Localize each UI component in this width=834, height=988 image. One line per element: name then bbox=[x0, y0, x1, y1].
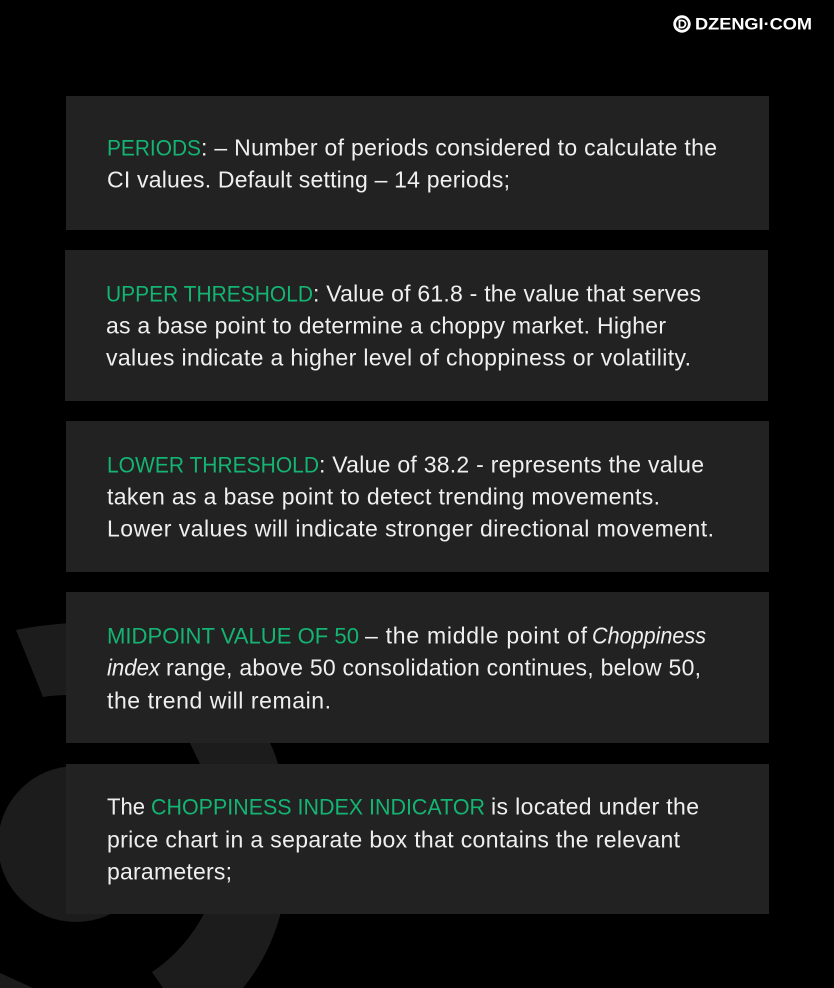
upper threshold text bbox=[106, 280, 701, 370]
panel: upper threshold bbox=[65, 250, 768, 401]
lower threshold text: taken as a base point to detect trending movements. bbox=[107, 483, 660, 509]
lower threshold text: Lower values will indicate stronger directional movement. bbox=[107, 515, 714, 541]
upper threshold text: as a base point to determine a choppy market. Higher bbox=[106, 312, 666, 338]
upper threshold text: : Value of 61.8 - the value that serves bbox=[313, 280, 701, 306]
lower threshold text bbox=[107, 451, 714, 541]
panel: midpoint value bbox=[66, 592, 769, 743]
midpoint text: MIDPOINT VALUE OF 50 bbox=[107, 623, 359, 648]
midpoint text: Choppiness bbox=[592, 622, 706, 648]
midpoint text: the trend will remain. bbox=[107, 687, 331, 713]
indicator location text: parameters; bbox=[107, 858, 232, 884]
panel: lower threshold bbox=[66, 421, 769, 572]
midpoint text: index bbox=[107, 654, 161, 680]
periods text: : – Number of periods considered to calculate the bbox=[201, 134, 717, 160]
midpoint text: – the middle point of bbox=[365, 622, 588, 648]
icon: logo mark bbox=[675, 17, 689, 31]
midpoint text: range, above 50 consolidation continues, below 50, bbox=[166, 654, 701, 680]
panel: periods bbox=[66, 96, 769, 230]
upper threshold text: values indicate a higher level of choppiness or volatility. bbox=[106, 344, 691, 370]
upper threshold text: UPPER THRESHOLD bbox=[106, 281, 313, 306]
indicator location text: CHOPPINESS INDEX INDICATOR bbox=[151, 794, 485, 819]
lower threshold text: LOWER THRESHOLD bbox=[107, 452, 319, 477]
periods text bbox=[107, 134, 717, 192]
indicator location text: The bbox=[107, 793, 145, 819]
logo wordmark: DZENGI·COM bbox=[695, 14, 812, 34]
background logo watermark bbox=[0, 623, 281, 988]
periods text: PERIODS bbox=[107, 135, 201, 160]
logo: dzengi.com bbox=[675, 14, 812, 34]
indicator location text bbox=[107, 793, 699, 884]
midpoint text bbox=[107, 622, 706, 713]
indicator location text: is located under the bbox=[491, 793, 699, 819]
periods text: CI values. Default setting – 14 periods; bbox=[107, 166, 510, 192]
panel: indicator location bbox=[66, 764, 769, 914]
indicator location text: price chart in a separate box that contains the relevant bbox=[107, 826, 681, 852]
lower threshold text: : Value of 38.2 - represents the value bbox=[319, 451, 704, 477]
